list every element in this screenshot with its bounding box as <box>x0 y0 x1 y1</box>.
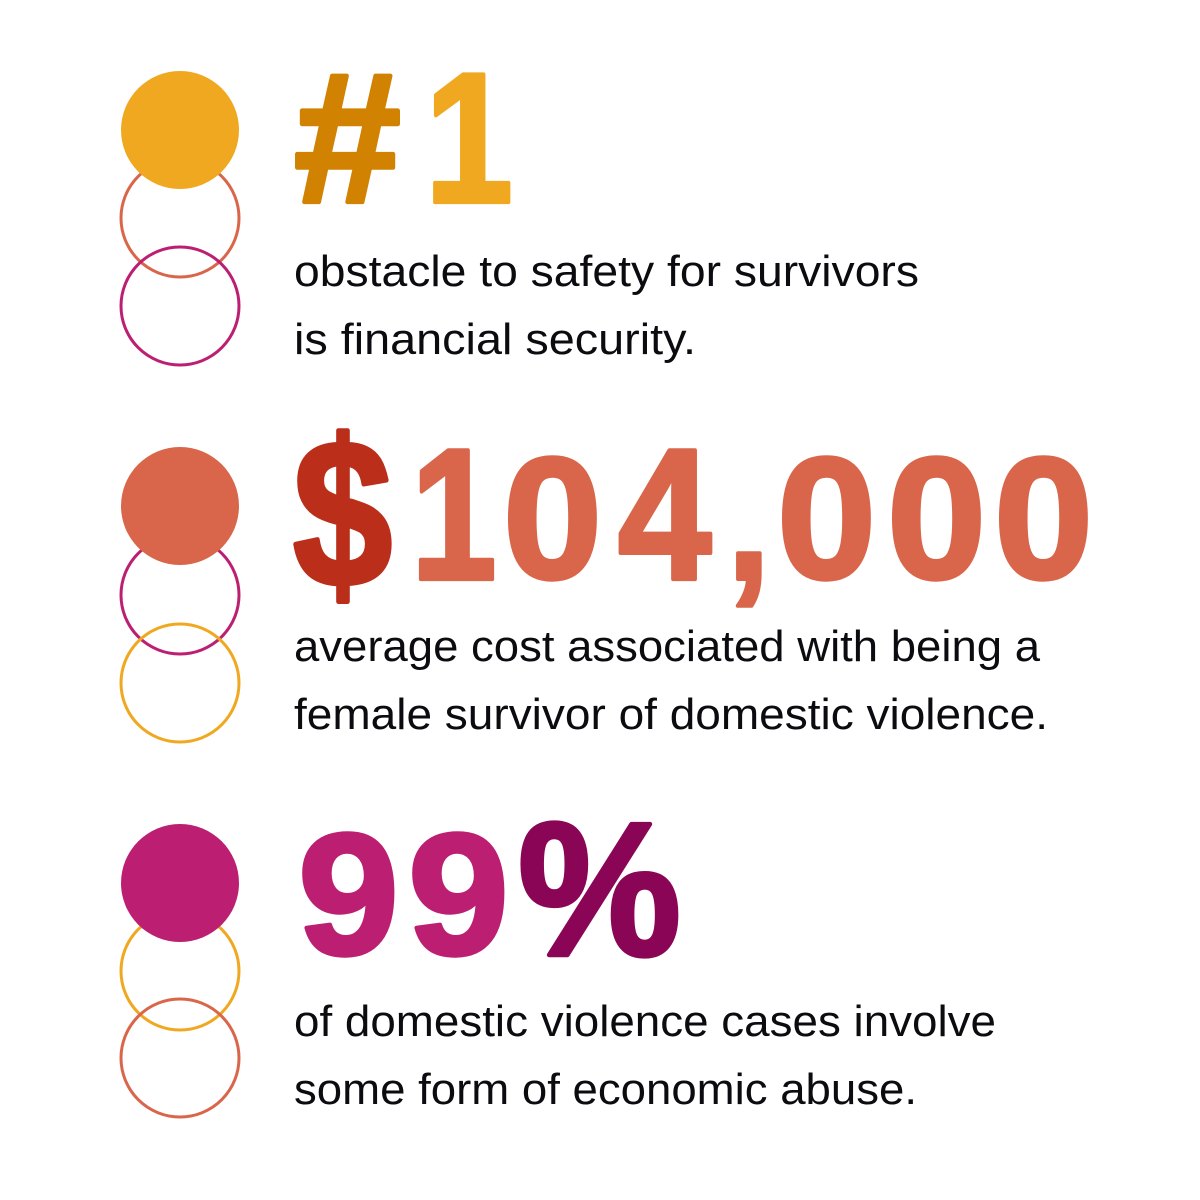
heading: #1: 1 <box>425 35 513 242</box>
heading: 99% <box>298 783 681 996</box>
panel: cost statistic <box>121 398 1093 742</box>
heading: 99%: 9 <box>298 797 399 991</box>
icon: stacked circles, coral <box>121 447 239 742</box>
text block: cost description: average cost associated with being a <box>294 622 1041 671</box>
text block: obstacle description <box>294 247 919 364</box>
text block: obstacle description: is financial security. <box>294 315 696 364</box>
heading: $104,000: 0 <box>503 422 602 615</box>
panel: economic abuse statistic <box>121 783 996 1117</box>
heading: #1: # <box>294 34 401 241</box>
heading: $104,000: 1 <box>411 411 497 619</box>
text block: cost description: female survivor of domestic violence. <box>294 690 1048 739</box>
heading: $104,000: 0 <box>994 422 1093 615</box>
text block: cost description <box>294 622 1048 739</box>
heading: $104,000: 4 <box>618 410 711 619</box>
icon: stacked circles, magenta <box>121 824 239 1117</box>
text block: economic abuse description: of domestic violence cases involve <box>294 997 996 1046</box>
heading: 99%: % <box>518 783 681 996</box>
heading: $104,000: , <box>727 422 770 616</box>
panel: obstacle statistic <box>121 34 919 365</box>
heading: $104,000: $ <box>293 398 392 631</box>
heading: $104,000: 0 <box>887 422 986 615</box>
heading: $104,000: 0 <box>777 422 876 615</box>
text block: economic abuse description <box>294 997 996 1114</box>
text block: economic abuse description: some form of economic abuse. <box>294 1065 917 1114</box>
heading: #1 <box>294 34 513 242</box>
icon: stacked circles, amber <box>121 71 239 365</box>
heading: 99%: 9 <box>408 797 509 991</box>
heading: $104,000 <box>293 398 1093 631</box>
text block: obstacle description: obstacle to safety for survivors <box>294 247 919 296</box>
